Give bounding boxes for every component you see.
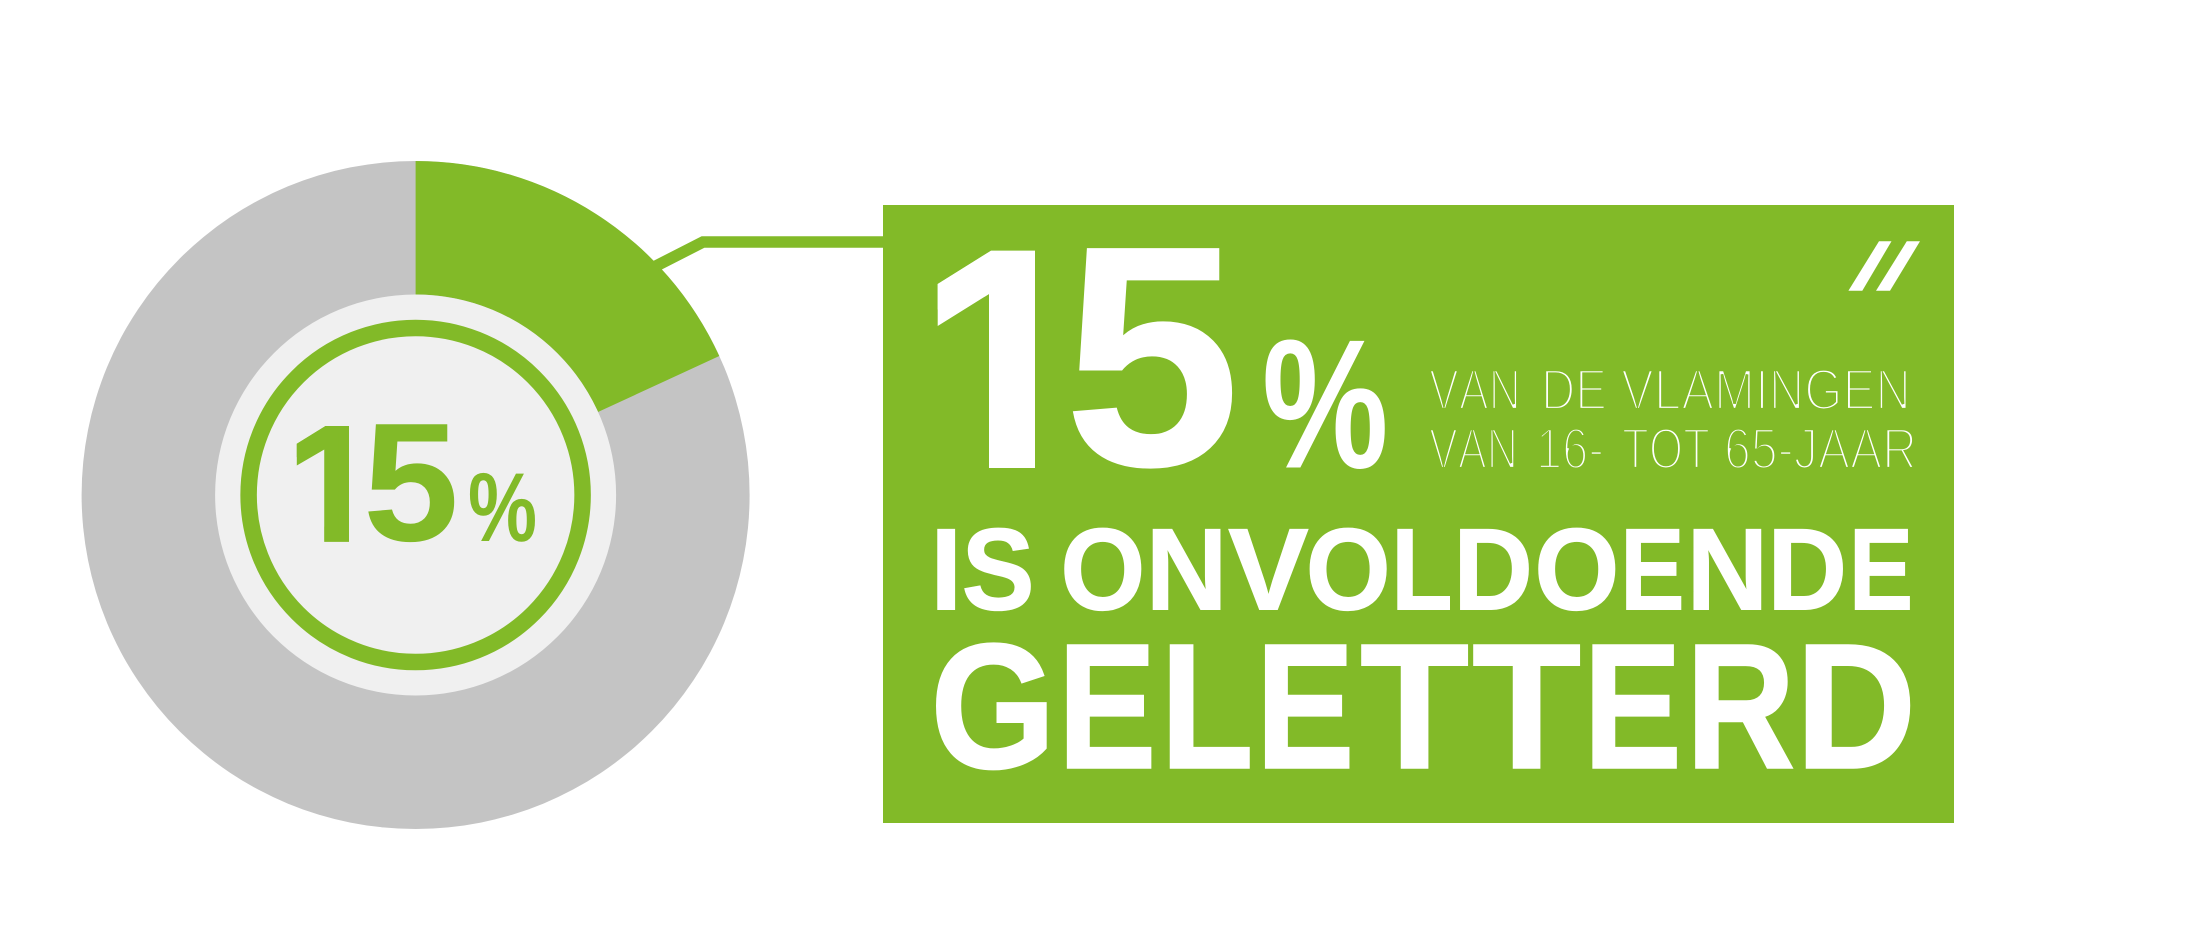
- text: van de Vlamingen van 16- tot 65-jaar: 65-JAAR: [1724, 416, 1917, 482]
- heading: is onvoldoende: D: [1453, 504, 1533, 634]
- heading: geletterd: E: [1058, 607, 1156, 806]
- text: van de Vlamingen van 16- tot 65-jaar: 16-: [1536, 416, 1604, 482]
- heading: geletterd: R: [1686, 607, 1795, 806]
- heading: is onvoldoende: N: [1686, 504, 1768, 634]
- donut: centre value 15%: [296, 424, 535, 542]
- heading: geletterd: G: [930, 607, 1056, 806]
- donut: grey remainder: [82, 161, 750, 829]
- heading: is onvoldoende: D: [1767, 504, 1847, 634]
- donut: green ring: [249, 328, 583, 662]
- donut: green 15% slice: [416, 161, 719, 412]
- donut: centre value 15%: 1: [276, 383, 391, 584]
- heading: is onvoldoende: [930, 504, 1913, 634]
- text: van de Vlamingen van 16- tot 65-jaar: [1429, 358, 1917, 482]
- text: van de Vlamingen van 16- tot 65-jaar: VAN: [1429, 416, 1518, 482]
- big value 15%: 5: [1063, 180, 1241, 532]
- heading: is onvoldoende: V: [1228, 504, 1309, 634]
- big value 15%: 1: [898, 173, 1104, 542]
- big value 15%: %: [1262, 300, 1388, 506]
- heading: is onvoldoende: N: [1146, 504, 1228, 634]
- heading: geletterd: E: [1583, 607, 1682, 806]
- heading: geletterd: T: [1360, 607, 1469, 806]
- heading: geletterd: T: [1472, 607, 1581, 806]
- heading: is onvoldoende: O: [1060, 504, 1145, 634]
- heading: is onvoldoende: E: [1620, 504, 1685, 634]
- donut: centre value 15%: 5: [363, 388, 459, 576]
- donut: centre value 15%: %: [468, 452, 537, 562]
- heading: is onvoldoende: O: [1534, 504, 1620, 634]
- donut chart: [82, 161, 750, 829]
- heading: is onvoldoende: O: [1306, 504, 1391, 634]
- text: van de Vlamingen van 16- tot 65-jaar: VLAMINGEN: [1621, 358, 1911, 422]
- heading: is onvoldoende: S: [962, 504, 1035, 634]
- heading: geletterd: E: [1256, 607, 1354, 806]
- heading: geletterd: L: [1160, 607, 1254, 806]
- icon: double slash mark: [1848, 241, 1920, 291]
- heading: geletterd: D: [1796, 607, 1916, 806]
- text: van de Vlamingen van 16- tot 65-jaar: DE: [1541, 358, 1607, 422]
- heading: is onvoldoende: E: [1849, 504, 1913, 634]
- heading: is onvoldoende: L: [1391, 504, 1453, 634]
- donut: inner disc: [215, 294, 616, 696]
- text: van de Vlamingen van 16- tot 65-jaar: VAN: [1429, 358, 1521, 422]
- leader line from slice to panel: [656, 242, 884, 266]
- panel: green statement: [883, 173, 1954, 823]
- big value 15%: [938, 248, 1385, 469]
- text: van de Vlamingen van 16- tot 65-jaar: TOT: [1622, 416, 1710, 482]
- heading: is onvoldoende: I: [930, 504, 962, 634]
